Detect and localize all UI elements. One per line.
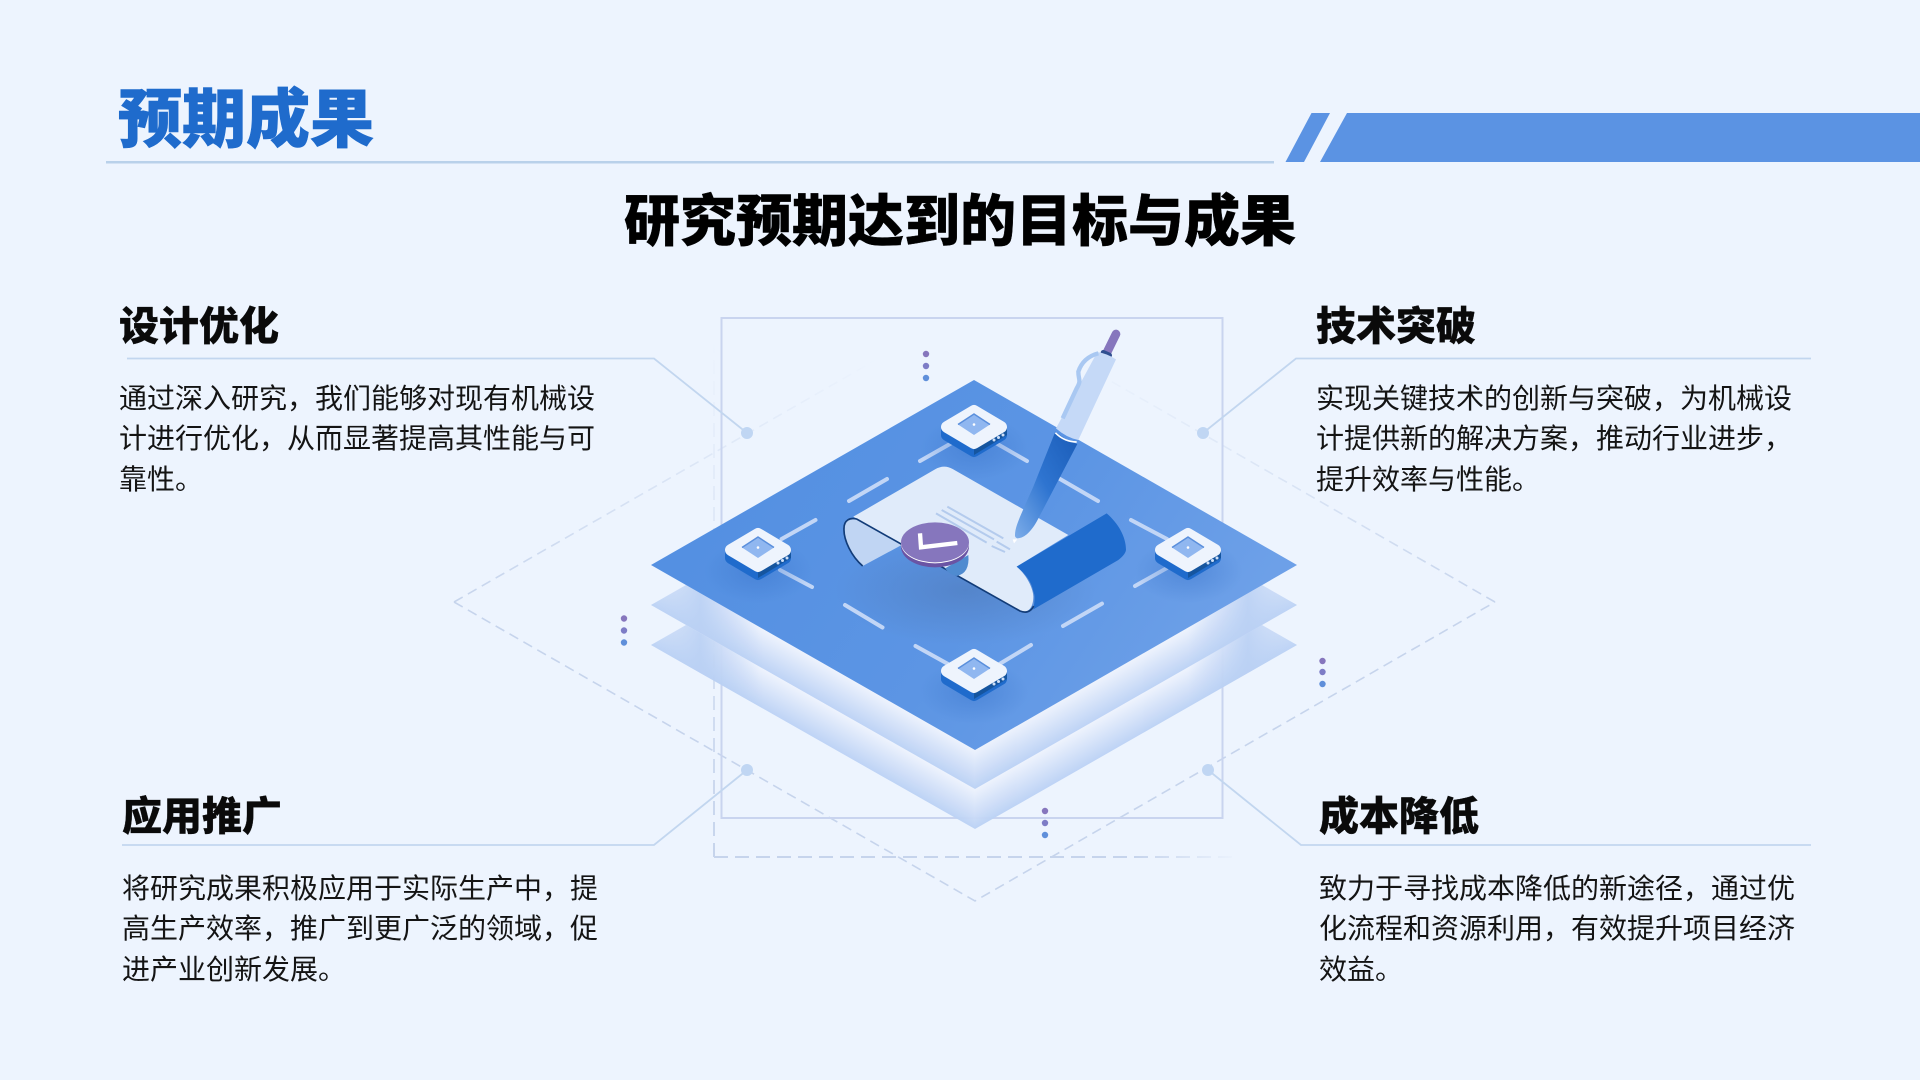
dots: bottom [1042,808,1048,838]
text: application promotion: 将研究成果积极应用于实际生产中，提 [122,873,598,904]
device: left [704,534,812,603]
paper shadow on platform [835,535,1095,645]
dots: left [621,615,627,646]
subtitle: 研究预期达到的目标与成果 [624,190,1296,253]
dashed offset frame [714,340,1240,857]
approval badge [901,522,969,576]
text: technology breakthrough: 实现关键技术的创新与突破，为机械设 [1316,383,1792,414]
text: technology breakthrough: 计提供新的解决方案，推动行业进步， [1316,423,1792,454]
connector: application promotion [122,764,753,845]
dots: right [1319,658,1326,687]
device: top [920,411,1028,480]
text: design optimisation: 计进行优化，从而显著提高其性能与可 [119,423,595,454]
main platform [651,380,1297,750]
text: application promotion: 高生产效率，推广到更广泛的领域，促 [122,913,598,944]
dots: top [923,351,929,381]
heading: application promotion: 应用推广 [122,795,282,839]
text: design optimisation [119,383,595,495]
connector: technology breakthrough [1197,358,1811,439]
device: bottom [920,655,1028,724]
text: application promotion [122,873,598,985]
device: right [1134,534,1242,603]
text: cost reduction: 致力于寻找成本降低的新途径，通过优 [1319,873,1795,904]
pen clip [1063,353,1098,418]
connector: design optimisation [127,358,753,439]
pen [1013,334,1116,543]
lower platform layer [651,461,1297,829]
header band [1286,113,1920,162]
text: cost reduction: 效益。 [1319,954,1403,985]
title rule [106,161,1274,164]
document blue roll [1017,513,1126,609]
dashed background diamond [454,303,1495,901]
document left curl [844,519,902,566]
heading: technology breakthrough: 技术突破 [1316,305,1476,349]
pen collar [1055,433,1077,442]
text: design optimisation: 通过深入研究，我们能够对现有机械设 [119,383,595,414]
heading: design optimisation: 设计优化 [119,305,279,349]
text: technology breakthrough: 提升效率与性能。 [1316,464,1540,495]
pen tip [1013,539,1017,543]
document text lines [936,507,1010,552]
text: cost reduction [1319,873,1795,985]
pen upper barrel [1056,352,1116,440]
text: cost reduction: 化流程和资源利用，有效提升项目经济 [1319,913,1795,944]
middle platform layer [651,421,1297,789]
text: technology breakthrough [1316,383,1792,495]
text: design optimisation: 靠性。 [119,464,203,495]
document sheet [853,467,1068,612]
title: 预期成果 [118,84,374,156]
dashed circuit links [780,440,1167,664]
rolled document [844,467,1126,612]
connector: cost reduction [1202,764,1811,845]
document outline [844,519,1034,612]
square frame [722,318,1222,818]
text: application promotion: 进产业创新发展。 [122,954,346,985]
pen button [1107,334,1116,352]
pen lower barrel [1015,432,1077,538]
heading: cost reduction: 成本降低 [1319,795,1479,839]
